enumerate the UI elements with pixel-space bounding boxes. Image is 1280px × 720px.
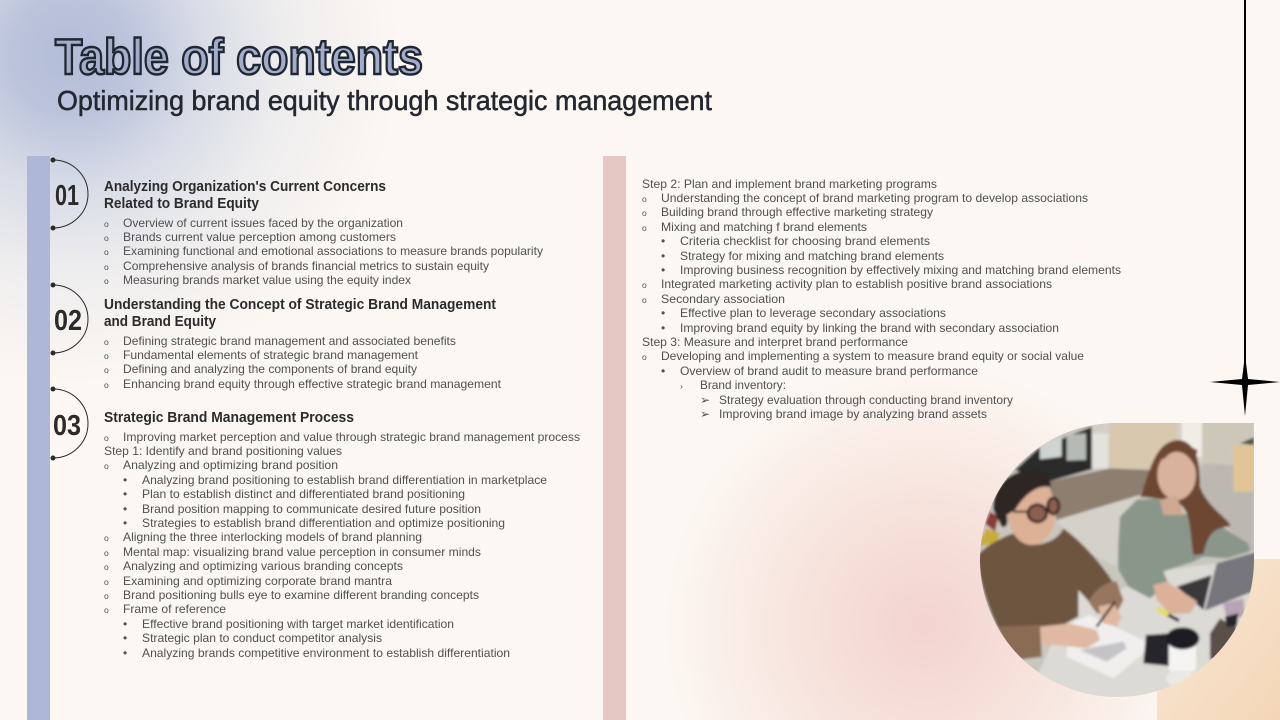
number badge 03 [50,386,88,460]
list 03: Analyzing and optimizing brand position [123,458,338,472]
list 03: • [123,473,127,487]
subtitle: Optimizing brand equity through strategic management [57,85,712,116]
list 03: Analyzing and optimizing various branding concepts [123,559,403,573]
right column list: • [661,321,665,335]
list 01: o [104,219,109,229]
right column list: o [642,223,647,233]
right column list: Improving business recognition by effectively mixing and matching brand elements [680,263,1121,277]
list 02: o [104,380,109,390]
list 02: Fundamental elements of strategic brand management [123,348,419,362]
right column list: o [642,194,647,204]
list 01: o [104,262,109,272]
right column list: Strategy for mixing and matching brand elements [680,249,944,263]
list 03: Strategies to establish brand differentiation and optimize positioning [142,516,505,530]
list 03: Examining and optimizing corporate brand mantra [123,574,392,588]
heading 02: and Brand Equity [104,314,216,330]
list 03: Effective brand positioning with target market identification [142,617,454,631]
list 03: • [123,516,127,530]
list 02: Defining and analyzing the components of brand equity [123,362,417,376]
heading 02: Understanding the Concept of Strategic Brand Management [104,297,496,313]
title: Table of contents [55,29,423,85]
right column list: Brand inventory: [700,378,786,392]
list 01: Examining functional and emotional associations to measure brands popularity [123,244,543,258]
right column list: Developing and implementing a system to measure brand equity or social value [661,349,1084,363]
section 03 [50,386,580,660]
list 03: o [104,577,109,587]
right column list: o [642,352,647,362]
number badge 02 [50,282,88,356]
right column list: o [642,208,647,218]
right column list: Integrated marketing activity plan to establish positive brand associations [661,277,1052,291]
right column list: Criteria checklist for choosing brand elements [680,234,930,248]
list 02: o [104,337,109,347]
number badge 02: 02 [54,305,82,337]
list 03: • [123,487,127,501]
section 02 [50,282,502,391]
list 01: Overview of current issues faced by the organization [123,216,403,230]
list 03: o [104,533,109,543]
photo: two women working at a table [977,420,1257,700]
right column list: Strategy evaluation through conducting brand inventory [719,393,1013,407]
list 01: o [104,276,109,286]
number badge 01: 01 [55,180,79,212]
heading 01: Analyzing Organization's Current Concerns [104,179,386,195]
list 01: Measuring brands market value using the equity index [123,273,411,287]
list 03: Step 1: Identify and brand positioning values [104,444,342,458]
list 03: o [104,548,109,558]
heading 01: Related to Brand Equity [104,196,259,212]
right column list: › [680,381,683,391]
list 01 [104,216,543,287]
list 03: Strategic plan to conduct competitor analysis [142,631,382,645]
right column list: ➢ [700,407,710,421]
right accent bar [603,156,626,720]
right column list [642,177,1121,421]
list 03: o [104,433,109,443]
right column list: • [661,263,665,277]
list 03: o [104,562,109,572]
list 02: Defining strategic brand management and associated benefits [123,334,456,348]
right column list: • [661,234,665,248]
heading 02 [104,297,496,330]
list 03: o [104,461,109,471]
right column list: Effective plan to leverage secondary associations [680,306,946,320]
list 03: • [123,617,127,631]
list 03: Aligning the three interlocking models of brand planning [123,530,422,544]
right column list: Step 3: Measure and interpret brand performance [642,335,908,349]
left accent bar [27,156,50,720]
list 03: Plan to establish distinct and differentiated brand positioning [142,487,465,501]
section 01 [50,158,543,287]
list 03: o [104,591,109,601]
number badge 03: 03 [53,410,81,442]
list 02 [104,334,502,391]
right column list: Improving brand equity by linking the brand with secondary association [680,321,1059,335]
list 03: Brand positioning bulls eye to examine different branding concepts [123,588,479,602]
right column list: Mixing and matching f brand elements [661,220,867,234]
right column list: Overview of brand audit to measure brand performance [680,364,978,378]
list 03: • [123,502,127,516]
heading 03: Strategic Brand Management Process [104,410,354,426]
right column list: Secondary association [661,292,785,306]
list 03: • [123,646,127,660]
vertical line with star [1210,0,1280,416]
list 02: Enhancing brand equity through effective strategic brand management [123,377,502,391]
right column list: o [642,280,647,290]
number badge 01 [50,158,88,230]
right column list: ➢ [700,393,710,407]
list 03: Mental map: visualizing brand value perception in consumer minds [123,545,481,559]
list 02: o [104,365,109,375]
list 03: Frame of reference [123,602,226,616]
heading 01 [104,179,386,212]
list 02: o [104,351,109,361]
right column list: • [661,306,665,320]
list 03: Brand position mapping to communicate desired future position [142,502,481,516]
list 01: o [104,233,109,243]
list 03: Improving market perception and value through strategic brand management process [123,430,580,444]
list 03: Analyzing brand positioning to establish brand differentiation in marketplace [142,473,547,487]
list 03: o [104,605,109,615]
list 01: Brands current value perception among customers [123,230,396,244]
right column list: Understanding the concept of brand marketing program to develop associations [661,191,1088,205]
right column list: • [661,249,665,263]
list 03: Analyzing brands competitive environment to establish differentiation [142,646,510,660]
right column list: Building brand through effective marketing strategy [661,205,933,219]
list 03: • [123,631,127,645]
right column list: o [642,295,647,305]
right column list: Improving brand image by analyzing brand assets [719,407,987,421]
list 01: Comprehensive analysis of brands financial metrics to sustain equity [123,259,489,273]
right column list: • [661,364,665,378]
list 01: o [104,247,109,257]
list 03 [104,430,580,660]
right column list: Step 2: Plan and implement brand marketing programs [642,177,937,191]
peach corner block [1157,559,1280,720]
